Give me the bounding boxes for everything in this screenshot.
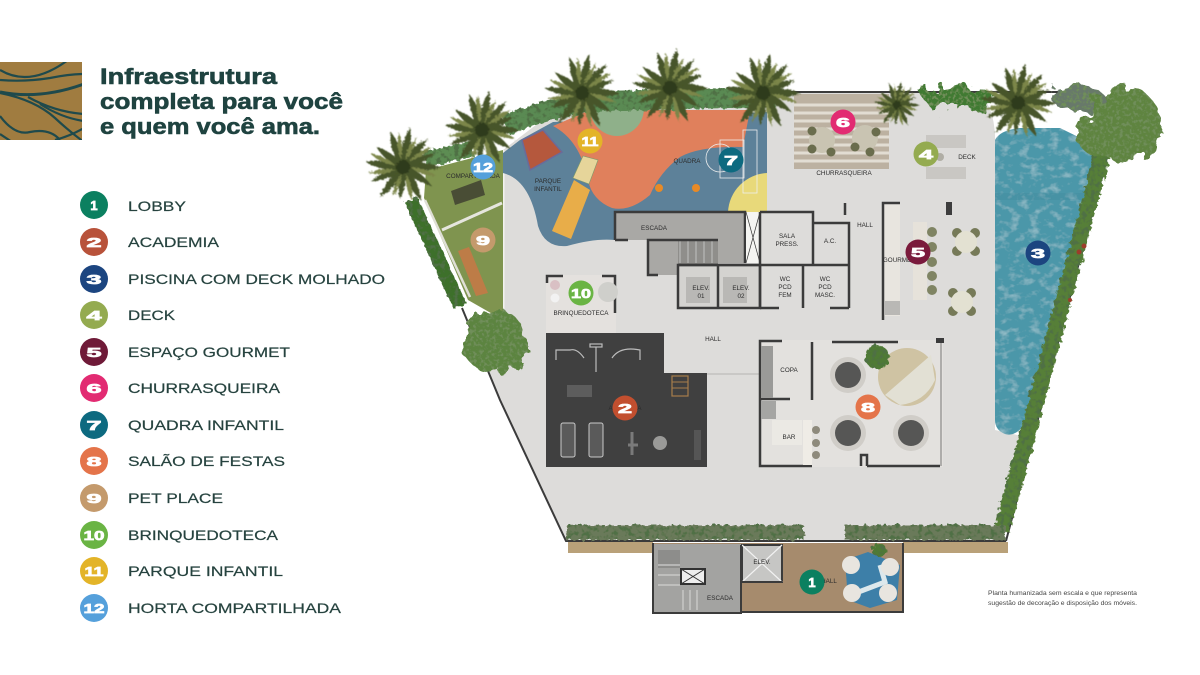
legend item 8: SALÃO DE FESTAS (128, 453, 285, 469)
room labels: ELEV. (692, 285, 710, 292)
legend item 7: QUADRA INFANTIL (128, 417, 284, 433)
marker 5 (906, 240, 930, 264)
deck (926, 135, 966, 179)
outer boundary walls (462, 92, 1108, 541)
title (100, 64, 343, 139)
pattern block: brown wave square (0, 60, 84, 142)
marker 6 (830, 110, 856, 134)
marker 11: 11 (582, 134, 598, 149)
salao de festas (759, 338, 944, 467)
marker 2: 2 (618, 401, 632, 416)
legend item 6: CHURRASQUEIRA (128, 380, 281, 396)
marker 9: 9 (476, 233, 490, 248)
legend item 7: 7 (86, 418, 102, 433)
room labels: HALL (821, 578, 837, 585)
stairs and service core (615, 203, 849, 308)
legend item 12 (80, 594, 342, 622)
room labels: BAR (783, 434, 796, 441)
legend item 3: PISCINA COM DECK MOLHADO (128, 271, 385, 287)
marker 4 (914, 142, 938, 166)
planters and hedges (411, 85, 1161, 540)
legend item 1 (80, 191, 187, 219)
marker 6: 6 (836, 115, 850, 130)
legend item 6 (80, 374, 281, 402)
churrasqueira (794, 94, 889, 169)
footnote: Planta humanizada sem escala e que representa (988, 591, 1138, 597)
marker 7: 7 (724, 153, 738, 168)
legend item 2: 2 (86, 235, 102, 250)
room labels: MASC. (815, 292, 835, 299)
legend item 4 (80, 301, 176, 329)
gourmet area (883, 202, 980, 320)
room labels: SALA (779, 233, 796, 240)
footnote (988, 591, 1138, 607)
legend item 12: 12 (84, 601, 104, 616)
marker 1 (800, 570, 824, 594)
legend item 10: BRINQUEDOTECA (128, 527, 279, 543)
room labels: COMPARTILHADA (446, 173, 501, 180)
marker 8 (856, 394, 880, 420)
room labels: PCD (778, 284, 792, 291)
climbing frame (522, 130, 562, 170)
marker 9 (470, 228, 496, 252)
slide (552, 180, 590, 239)
room labels: PARQUE (535, 178, 561, 185)
legend item 9: 9 (86, 491, 102, 506)
legend item 10 (80, 521, 279, 549)
legend item 1: 1 (90, 198, 98, 213)
legend item 10: 10 (84, 528, 104, 543)
room labels: ELEV. (753, 559, 771, 566)
legend item 5: 5 (86, 345, 102, 360)
legend item 9 (80, 484, 223, 512)
legend item 2: ACADEMIA (128, 234, 220, 250)
room labels: WC (820, 276, 831, 283)
marker 8: 8 (861, 400, 875, 415)
marker 3: 3 (1031, 246, 1045, 261)
room labels: CHURRASQUEIRA (816, 170, 872, 177)
room labels: ACADEMIA (609, 405, 642, 412)
legend item 5 (80, 338, 291, 366)
plan markers (470, 110, 1050, 594)
legend item 11 (80, 557, 283, 585)
floor slab (468, 93, 1022, 541)
marker 10 (568, 280, 594, 306)
brinquedoteca (546, 275, 618, 333)
legend item 8: 8 (86, 454, 102, 469)
legend (80, 191, 385, 622)
title: completa para você (100, 89, 343, 114)
room labels: WC (780, 276, 791, 283)
legend item 3 (80, 265, 385, 293)
court lines (706, 130, 757, 193)
legend item 11: PARQUE INFANTIL (128, 563, 283, 579)
title: e quem você ama. (100, 114, 320, 139)
legend item 8 (80, 447, 285, 475)
title: Infraestrutura (100, 64, 278, 89)
lobby block (653, 543, 903, 613)
marker 4: 4 (919, 147, 934, 162)
floor plan (365, 48, 1161, 613)
room labels: QUADRA (674, 158, 701, 165)
legend item 2 (80, 228, 220, 256)
legend item 9: PET PLACE (128, 490, 223, 506)
legend item 1: LOBBY (128, 198, 187, 214)
room labels: PRESS. (775, 241, 799, 248)
room labels: A.C. (824, 238, 836, 245)
academia (546, 333, 759, 467)
legend item 11: 11 (84, 564, 104, 579)
marker 11 (578, 128, 602, 154)
room labels: PCD (818, 284, 832, 291)
legend item 7 (80, 411, 284, 439)
legend item 3: 3 (86, 272, 102, 287)
room labels: 01 (697, 293, 705, 300)
room labels: HALL (705, 336, 721, 343)
room labels (446, 154, 977, 602)
marker 3 (1026, 240, 1050, 266)
marker 12 (470, 154, 496, 180)
room labels: ESCADA (707, 595, 734, 602)
marker 5: 5 (911, 245, 925, 260)
room labels: DECK (958, 154, 977, 161)
tan base strip (568, 542, 1008, 553)
room labels: INFANTIL (534, 186, 562, 193)
room labels: 02 (737, 293, 745, 300)
room labels: FESTAS (856, 406, 880, 413)
legend item 5: ESPAÇO GOURMET (128, 344, 291, 360)
room labels: GOURMET (883, 257, 915, 264)
room labels: HALL (857, 222, 873, 229)
pool (995, 128, 1105, 435)
marker 1: 1 (808, 575, 816, 590)
room labels: ELEV. (732, 285, 750, 292)
marker 7 (718, 148, 744, 172)
garden: pet place and horta (424, 150, 504, 320)
legend item 6: 6 (86, 381, 102, 396)
marker 2 (612, 396, 638, 420)
playground: parque infantil and quadra (503, 108, 767, 246)
room labels: ESCADA (641, 225, 668, 232)
room labels: COPA (780, 367, 798, 374)
palm trees (365, 48, 1056, 203)
legend item 4: DECK (128, 307, 176, 323)
footnote: sugestão de decoração e disposição dos móveis. (988, 601, 1137, 607)
room labels: FEM (778, 292, 792, 299)
marker 10: 10 (571, 286, 591, 301)
marker 12: 12 (473, 160, 493, 175)
legend item 4: 4 (86, 308, 103, 323)
legend item 12: HORTA COMPARTILHADA (128, 600, 342, 616)
room labels: BRINQUEDOTECA (554, 310, 609, 317)
